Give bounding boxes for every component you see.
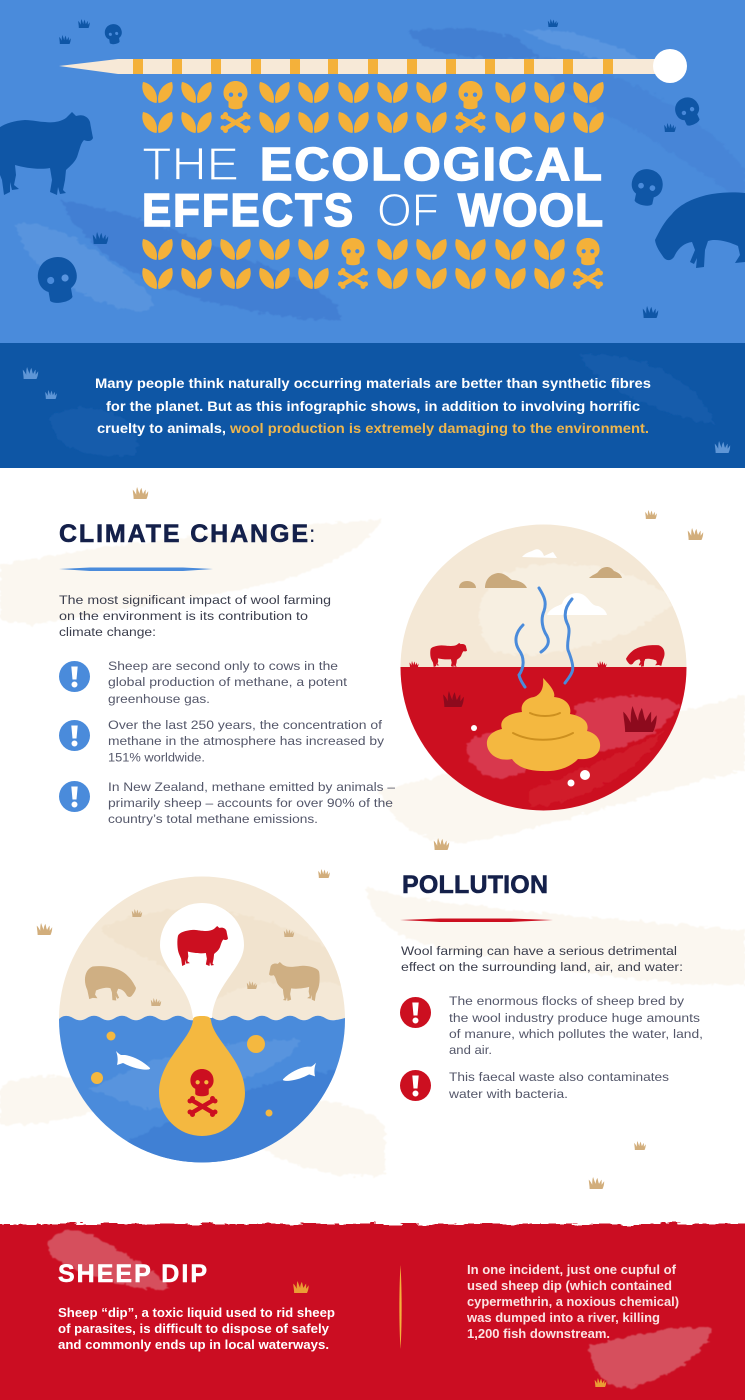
- white keyhole: [160, 903, 244, 1018]
- text: sheep dip right: used sheep dip (which contained: [467, 1279, 672, 1293]
- fact: manure: and air.: [449, 1043, 492, 1057]
- red sheep: [177, 926, 228, 966]
- fact: New Zealand: In New Zealand, methane emitted by animals –: [108, 780, 395, 794]
- divider: gold: [399, 1265, 402, 1349]
- fact: New Zealand: country’s total methane emissions.: [108, 812, 318, 826]
- icon: alert red: [400, 1070, 431, 1101]
- steam: [516, 588, 573, 687]
- divider: climate: [59, 568, 213, 571]
- icon: alert blue: [59, 661, 90, 692]
- fact: manure: [449, 994, 703, 1057]
- title: EFFECTS: [142, 184, 355, 236]
- fact: concentration: methane in the atmosphere has increased by: [108, 734, 385, 748]
- text: climate intro: The most significant impact of wool farming: [59, 593, 331, 607]
- text: sheep dip left: Sheep “dip”, a toxic liquid used to rid sheep: [58, 1306, 335, 1320]
- intro text: cruelty to animals,: [97, 421, 226, 436]
- icons: band grass: [23, 367, 730, 453]
- text: climate intro: climate change:: [59, 625, 156, 639]
- fact: concentration: Over the last 250 years, the concentration of: [108, 718, 383, 732]
- intro text: wool production is extremely damaging to the environment.: [229, 421, 649, 436]
- divider: pollution: [400, 918, 553, 922]
- fish: [116, 1051, 316, 1081]
- intro text: Many people think naturally occurring materials are better than synthetic fibres: [95, 376, 651, 391]
- intro text: [95, 376, 651, 436]
- fact: methane: greenhouse gas.: [108, 692, 210, 706]
- fact: manure: The enormous flocks of sheep bred by: [449, 994, 685, 1008]
- bubbles: [471, 725, 590, 786]
- background brush strokes: [0, 520, 745, 1176]
- tan sheep: [85, 962, 320, 1001]
- fact: concentration: [108, 718, 385, 764]
- text: pollution intro: Wool farming can have a serious detrimental: [401, 944, 677, 958]
- water: [59, 1016, 345, 1165]
- gold dots: [91, 1032, 272, 1116]
- panel: header: [0, 0, 745, 343]
- heading: sheep dip: SHEEP DIP: [58, 1260, 207, 1288]
- fact: manure: the wool industry produce huge amounts: [449, 1011, 700, 1025]
- text: pollution intro: [401, 944, 683, 974]
- heading: climate change: :: [309, 521, 315, 547]
- title: ECOLOGICAL: [260, 138, 604, 190]
- fact: New Zealand: [108, 780, 395, 826]
- heading: pollution: POLLUTION: [402, 871, 548, 899]
- icon: alert red: [400, 997, 431, 1028]
- text: sheep dip left: of parasites, is difficult to dispose of safely: [58, 1322, 329, 1336]
- text: sheep dip right: [466, 1263, 679, 1341]
- icon: knitting needle: [59, 49, 687, 83]
- grazing and standing sheep: [410, 643, 665, 668]
- icons: tan grass on white: [37, 487, 703, 1189]
- fact: manure: of manure, which pollutes the water, land,: [449, 1027, 703, 1041]
- fact: methane: [108, 659, 348, 706]
- brush stroke: left: [47, 1230, 170, 1290]
- text: sheep dip right: 1,200 fish downstream.: [467, 1327, 610, 1341]
- intro text: for the planet. But as this infographic shows, in addition to involving horrific: [106, 399, 641, 414]
- panel: sheep dip: [0, 1224, 745, 1400]
- fact: bacteria: [448, 1070, 669, 1101]
- text: sheep dip right: In one incident, just one cupful of: [467, 1263, 677, 1277]
- red skull and bones: [188, 1069, 218, 1117]
- icon: alert blue: [59, 720, 90, 751]
- dark grass: [443, 691, 657, 732]
- title: WOOL: [458, 184, 604, 236]
- icons: dark blue grass: [59, 19, 676, 318]
- pattern: bottom leaves and skulls: [142, 238, 603, 289]
- illustration: manure circle: [400, 524, 688, 812]
- text: sheep dip left: [58, 1306, 335, 1352]
- text: pollution intro: effect on the surrounding land, air, and water:: [401, 960, 683, 974]
- fact: New Zealand: primarily sheep – accounts for over 90% of the: [108, 796, 393, 810]
- icons: dark blue sheep: [0, 112, 745, 268]
- fact: bacteria: water with bacteria.: [448, 1087, 568, 1101]
- fact: methane: Sheep are second only to cows in the: [108, 659, 338, 673]
- brush stroke: right: [590, 1327, 712, 1388]
- water brush strokes: [90, 1040, 345, 1170]
- pattern: top leaves and skulls: [142, 81, 604, 133]
- text: sheep dip right: cypermethrin, a noxious chemical): [467, 1295, 679, 1309]
- title: OF: [377, 184, 439, 236]
- title: [142, 138, 604, 236]
- fact: methane: global production of methane, a potent: [108, 675, 348, 689]
- manure pile: [487, 678, 600, 771]
- poison bulb: [159, 1016, 245, 1136]
- clouds: [459, 567, 622, 588]
- icons: gold grass: [293, 1281, 606, 1387]
- fact: concentration: 151% worldwide.: [108, 750, 205, 764]
- icons: dark blue skulls: [35, 23, 705, 306]
- text: climate intro: on the environment is its contribution to: [59, 609, 308, 623]
- text: sheep dip left: and commonly ends up in local waterways.: [58, 1338, 329, 1352]
- tan grass: [132, 909, 294, 1006]
- text: climate intro: [59, 593, 331, 639]
- illustration: water contamination circle: [59, 876, 345, 1170]
- red brush strokes: [465, 696, 680, 808]
- title: THE: [142, 138, 239, 190]
- header brush strokes: [15, 28, 638, 320]
- panel: intro band: [0, 343, 745, 468]
- heading: climate change: CLIMATE CHANGE: [59, 520, 308, 548]
- list: climate facts: [59, 659, 395, 826]
- list: pollution facts: [400, 994, 703, 1101]
- icon: alert blue: [59, 781, 90, 812]
- text: sheep dip right: was dumped into a river, killing: [466, 1311, 660, 1325]
- fact: bacteria: This faecal waste also contaminates: [449, 1070, 669, 1084]
